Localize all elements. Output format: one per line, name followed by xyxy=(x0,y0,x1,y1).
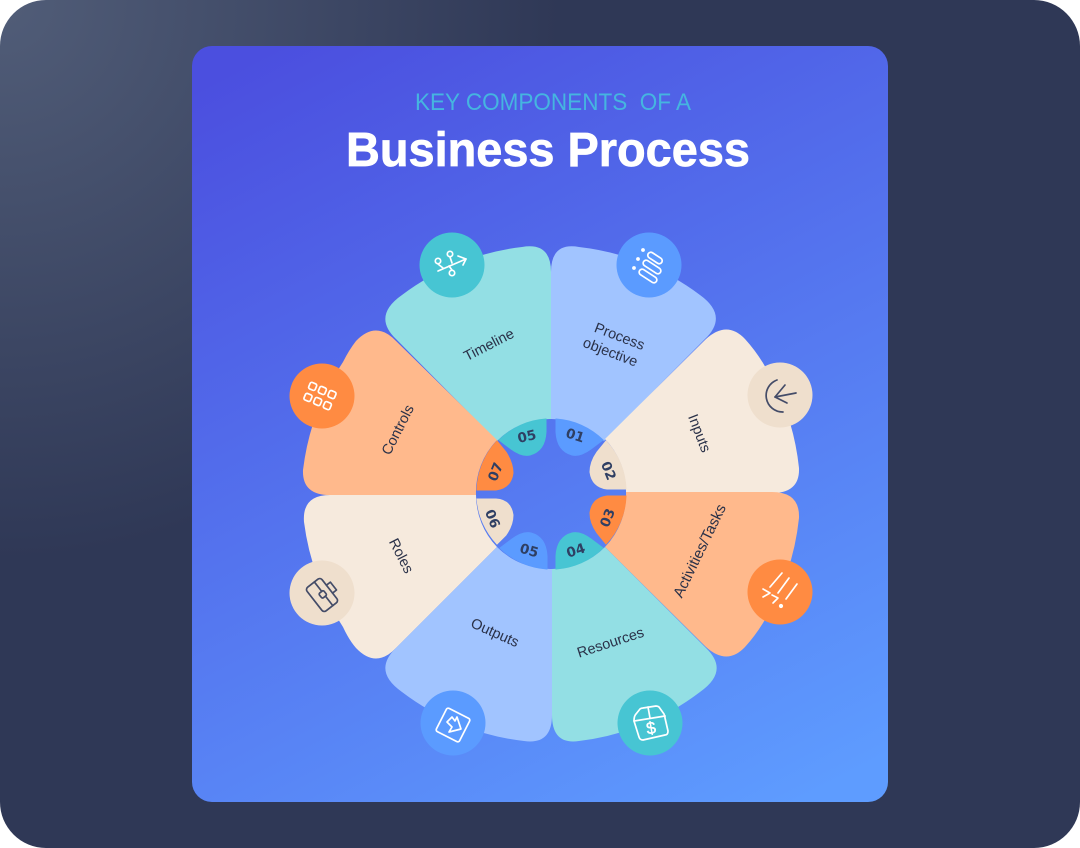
number tab 03 xyxy=(590,496,626,544)
icon: roles briefcase xyxy=(290,560,354,626)
segment: activities / tasks xyxy=(605,492,799,656)
number tab 05 lower xyxy=(500,533,547,569)
number tab 01 xyxy=(556,419,603,455)
label: controls: Controls xyxy=(379,402,418,458)
label: activities / tasks: Activities/Tasks xyxy=(670,502,730,600)
label: process objective: objective xyxy=(580,335,640,371)
number tab 04 xyxy=(556,533,603,569)
icon: outputs xyxy=(420,690,486,756)
label: outputs: Outputs xyxy=(468,616,521,651)
number tab 01: 01 xyxy=(564,425,586,447)
segment: process objective xyxy=(551,246,716,441)
icon: process objective xyxy=(616,232,682,298)
number tab 02 xyxy=(590,441,626,489)
segment: outputs xyxy=(385,547,552,741)
icon: resources box: $ xyxy=(645,718,658,738)
number tab 03: 03 xyxy=(597,506,619,530)
label: inputs: Inputs xyxy=(684,412,713,455)
number tab 06 xyxy=(477,499,513,544)
segment: resources xyxy=(552,547,717,741)
number tab 05 upper xyxy=(499,419,546,455)
label: process objective: Process xyxy=(592,320,647,354)
icon: controls xyxy=(290,364,354,428)
number tab 02: 02 xyxy=(597,459,619,483)
label: timeline: Timeline xyxy=(461,326,517,365)
number tab 06: 06 xyxy=(481,507,503,531)
icon: timeline xyxy=(420,232,484,298)
segment: roles xyxy=(304,495,497,658)
label: roles: Roles xyxy=(385,536,416,576)
icon: inputs xyxy=(748,362,812,428)
icon: activities xyxy=(748,560,812,624)
segment: inputs xyxy=(605,330,799,493)
number tab 04: 04 xyxy=(565,540,587,562)
number tab 07 xyxy=(477,441,513,490)
subtitle: KEY COMPONENTS OF A xyxy=(415,89,691,116)
label: resources: Resources xyxy=(575,625,646,662)
number tab 07: 07 xyxy=(485,460,507,484)
segment: controls xyxy=(303,330,497,495)
number tab 05 lower: 05 xyxy=(518,541,540,561)
title: Business Process xyxy=(346,124,750,177)
segment: timeline xyxy=(385,246,551,441)
infographic card xyxy=(192,46,888,802)
icon: resources box xyxy=(618,690,682,756)
number tab 05 upper: 05 xyxy=(516,427,538,447)
